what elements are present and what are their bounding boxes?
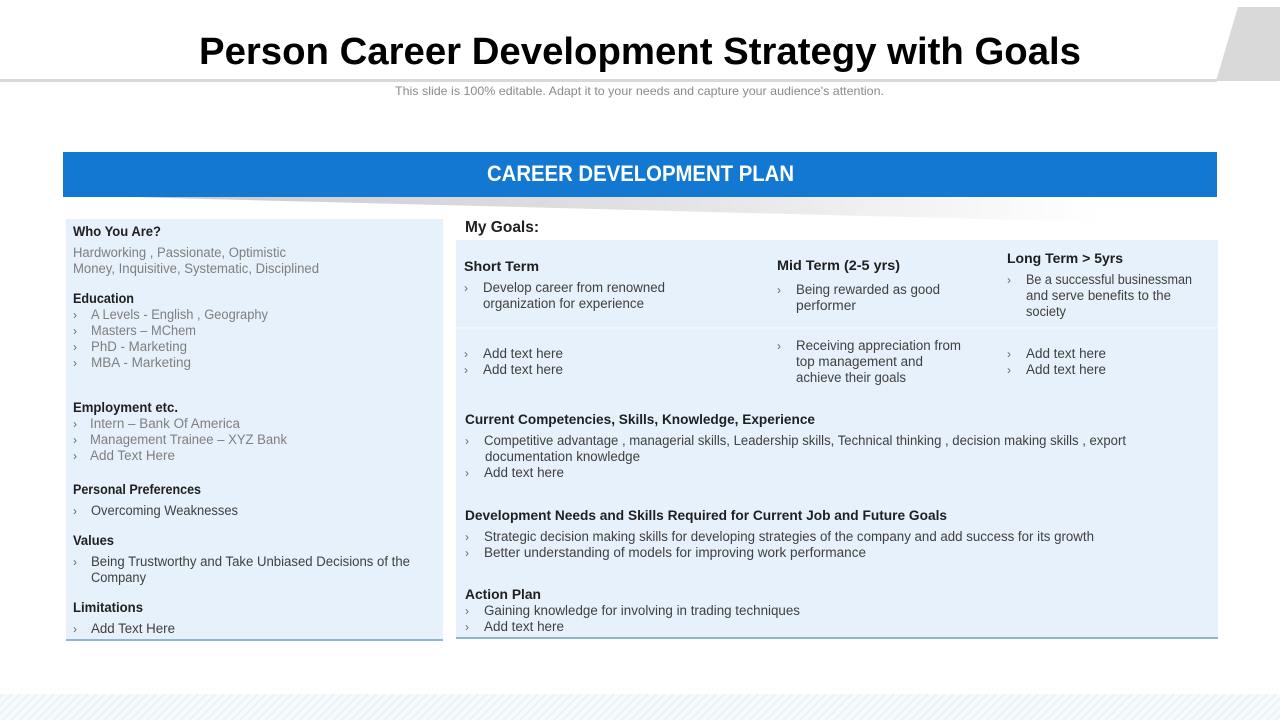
action plan: › (465, 620, 469, 634)
subtitle: This slide is 100% editable. Adapt it to your needs and capture your audience's attention. (395, 84, 884, 98)
short term extra items: › (464, 363, 468, 377)
who you are: Money, Inquisitive, Systematic, Disciplined (73, 261, 319, 276)
action plan: Gaining knowledge for involving in trading techniques (484, 603, 800, 618)
banner: career development plan: CAREER DEVELOPMENT PLAN (487, 161, 794, 186)
values: Values (73, 533, 114, 548)
employment: › (73, 433, 77, 447)
employment: Intern – Bank Of America (90, 416, 240, 431)
employment: Add Text Here (90, 448, 175, 463)
long term: Long Term > 5yrs (1007, 251, 1123, 266)
panel: goals (456, 240, 1218, 639)
education: Masters – MChem (91, 323, 196, 338)
values (73, 533, 410, 585)
mid term (777, 258, 940, 313)
development needs: Strategic decision making skills for developing strategies of the company and add success for its growth (484, 529, 1094, 544)
education: PhD - Marketing (91, 339, 187, 354)
personal preferences: Personal Preferences (73, 482, 201, 497)
long term extra items: › (1007, 363, 1011, 377)
education: › (73, 340, 77, 354)
education: › (73, 308, 77, 322)
employment (73, 400, 287, 463)
who you are (73, 224, 319, 276)
mid term: performer (796, 298, 857, 313)
panel: profile (66, 219, 443, 641)
header corner shape (1216, 7, 1280, 81)
long term (1007, 251, 1192, 319)
education: › (73, 356, 77, 370)
short term: › (464, 281, 468, 295)
mid term extra item: Receiving appreciation from (796, 338, 961, 353)
values: Being Trustworthy and Take Unbiased Decisions of the (91, 554, 410, 569)
development needs: › (465, 530, 469, 544)
short term extra items: › (464, 347, 468, 361)
long term extra items (1007, 346, 1106, 377)
banner shadow (130, 197, 1100, 222)
employment: Employment etc. (73, 400, 178, 415)
development needs: Better understanding of models for improving work performance (484, 545, 866, 560)
title: Person Career Development Strategy with Goals (199, 31, 1081, 73)
development needs: Development Needs and Skills Required for Current Job and Future Goals (465, 508, 947, 523)
current competencies: › (465, 466, 469, 480)
development needs: › (465, 546, 469, 560)
development needs (465, 508, 1094, 560)
current competencies: › (465, 434, 469, 448)
who you are: Who You Are? (73, 224, 161, 239)
limitations: Add Text Here (91, 621, 175, 636)
current competencies: Competitive advantage , managerial skills, Leadership skills, Technical thinking , decision making skills , export (484, 433, 1126, 448)
education: › (73, 324, 77, 338)
mid term extra item: achieve their goals (796, 370, 906, 385)
short term: Develop career from renowned (483, 280, 665, 295)
values: Company (91, 570, 146, 585)
short term (464, 259, 665, 311)
mid term extra item: top management and (796, 354, 923, 369)
employment: › (73, 449, 77, 463)
personal preferences (73, 482, 238, 518)
limitations: › (73, 622, 77, 636)
current competencies (465, 412, 1126, 480)
current competencies: Current Competencies, Skills, Knowledge, Experience (465, 412, 815, 427)
education: MBA - Marketing (91, 355, 191, 370)
long term: society (1026, 304, 1066, 319)
education: Education (73, 291, 134, 306)
mid term: Mid Term (2-5 yrs) (777, 258, 900, 273)
who you are: Hardworking , Passionate, Optimistic (73, 245, 286, 260)
employment: › (73, 417, 77, 431)
short term extra items: Add text here (483, 362, 563, 377)
limitations: Limitations (73, 600, 143, 615)
personal preferences: › (73, 504, 77, 518)
short term extra items: Add text here (483, 346, 563, 361)
action plan (465, 587, 800, 634)
long term: Be a successful businessman (1026, 272, 1192, 287)
long term: › (1007, 273, 1011, 287)
header rule (0, 79, 1217, 82)
mid term: › (777, 283, 781, 297)
action plan: › (465, 604, 469, 618)
heading: my goals: My Goals: (465, 219, 539, 236)
action plan: Action Plan (465, 587, 541, 602)
footer stripe band (0, 694, 1280, 720)
employment: Management Trainee – XYZ Bank (90, 432, 287, 447)
current competencies: documentation knowledge (485, 449, 640, 464)
values: › (73, 555, 77, 569)
long term extra items: › (1007, 347, 1011, 361)
action plan: Add text here (484, 619, 564, 634)
short term extra items (464, 346, 563, 377)
mid term extra item (777, 338, 961, 385)
mid term extra item: › (777, 339, 781, 353)
mid term: Being rewarded as good (796, 282, 940, 297)
long term extra items: Add text here (1026, 362, 1106, 377)
education: A Levels - English , Geography (91, 307, 268, 322)
banner: career development plan (63, 152, 1217, 197)
short term: Short Term (464, 259, 539, 274)
long term extra items: Add text here (1026, 346, 1106, 361)
long term: and serve benefits to the (1026, 288, 1171, 303)
limitations (73, 600, 175, 636)
short term: organization for experience (483, 296, 644, 311)
current competencies: Add text here (484, 465, 564, 480)
education (73, 291, 268, 370)
personal preferences: Overcoming Weaknesses (91, 503, 238, 518)
